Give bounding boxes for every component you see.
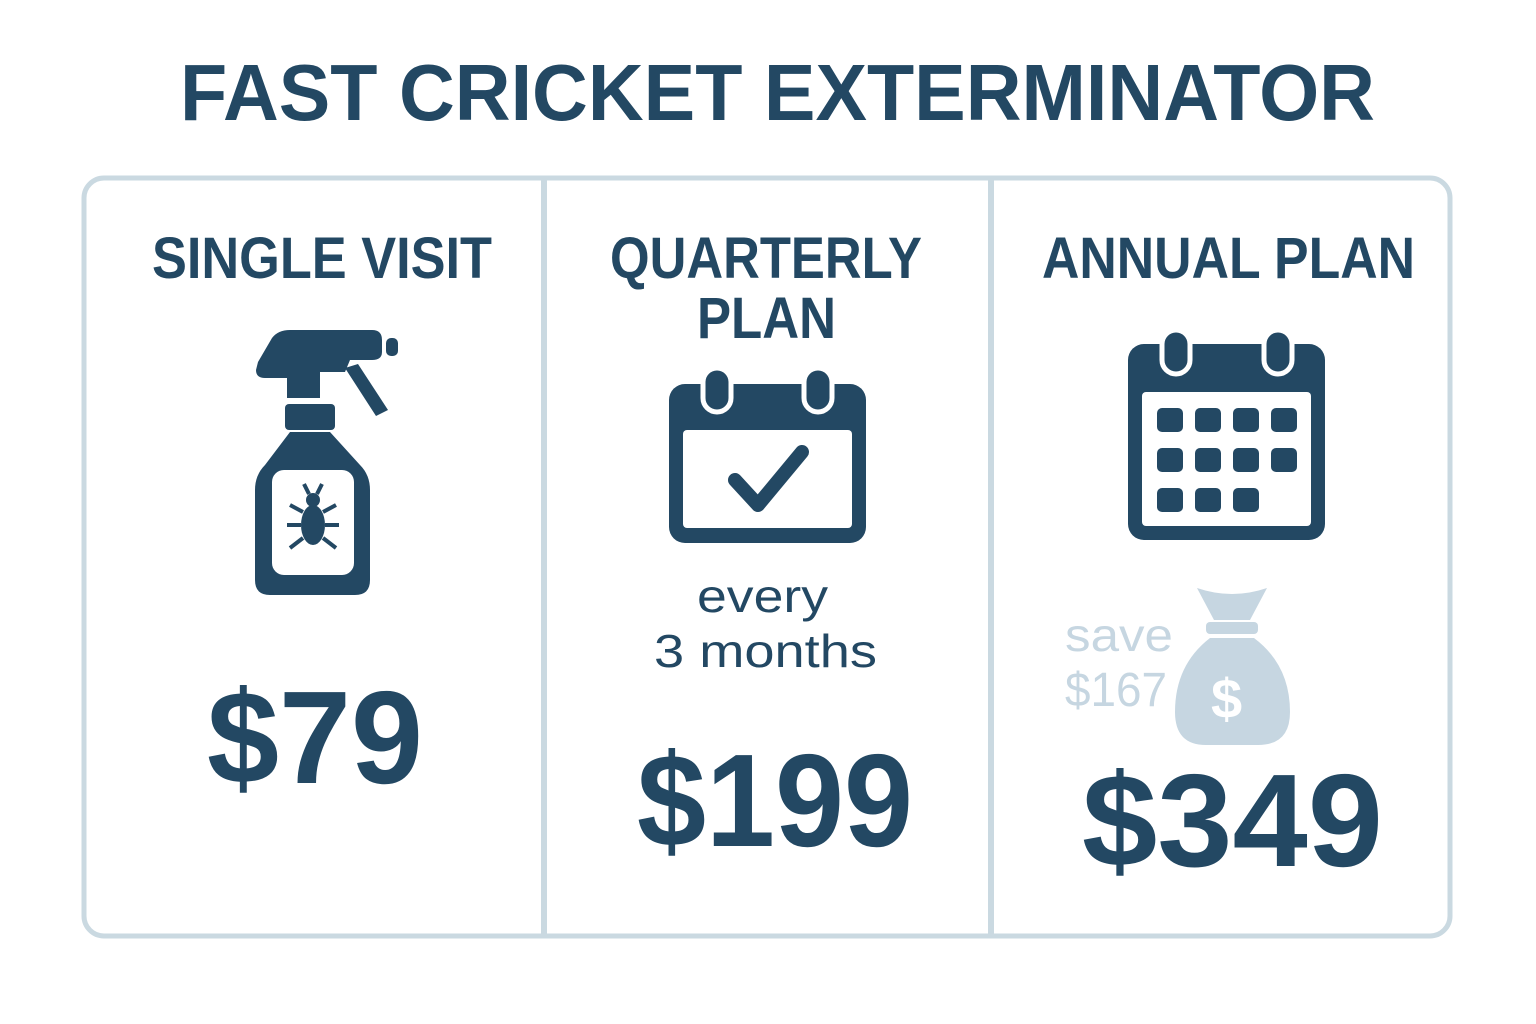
text: every 3 months: every: [697, 570, 828, 622]
callout: save 167: $167: [1065, 664, 1167, 717]
icon: calendar check: [669, 368, 866, 543]
heading: quarterly plan: QUARTERLY: [610, 226, 922, 291]
icon: calendar grid: [1128, 330, 1325, 540]
text: every 3 months: 3 months: [654, 625, 877, 677]
panel frame: [84, 178, 1450, 936]
price: 349: $349: [1082, 747, 1383, 894]
panel: single visit: [152, 226, 492, 811]
heading: annual plan: ANNUAL PLAN: [1042, 226, 1415, 291]
icon: spray bottle: [255, 330, 398, 595]
price: 79: $79: [207, 664, 423, 811]
heading: quarterly plan: PLAN: [697, 286, 836, 351]
panel: quarterly plan: [610, 226, 922, 874]
heading: quarterly plan: [610, 226, 922, 351]
panel: annual plan: [1042, 226, 1415, 894]
callout: save 167: save: [1065, 609, 1173, 661]
text: every 3 months: [654, 570, 877, 677]
icon: money bag: $: [1211, 667, 1242, 730]
price: 199: $199: [637, 727, 913, 874]
icon: money bag: [1175, 588, 1290, 745]
heading: single visit: SINGLE VISIT: [152, 226, 492, 291]
callout: save 167: [1065, 609, 1173, 717]
title: FAST CRICKET EXTERMINATOR: [180, 48, 1375, 137]
